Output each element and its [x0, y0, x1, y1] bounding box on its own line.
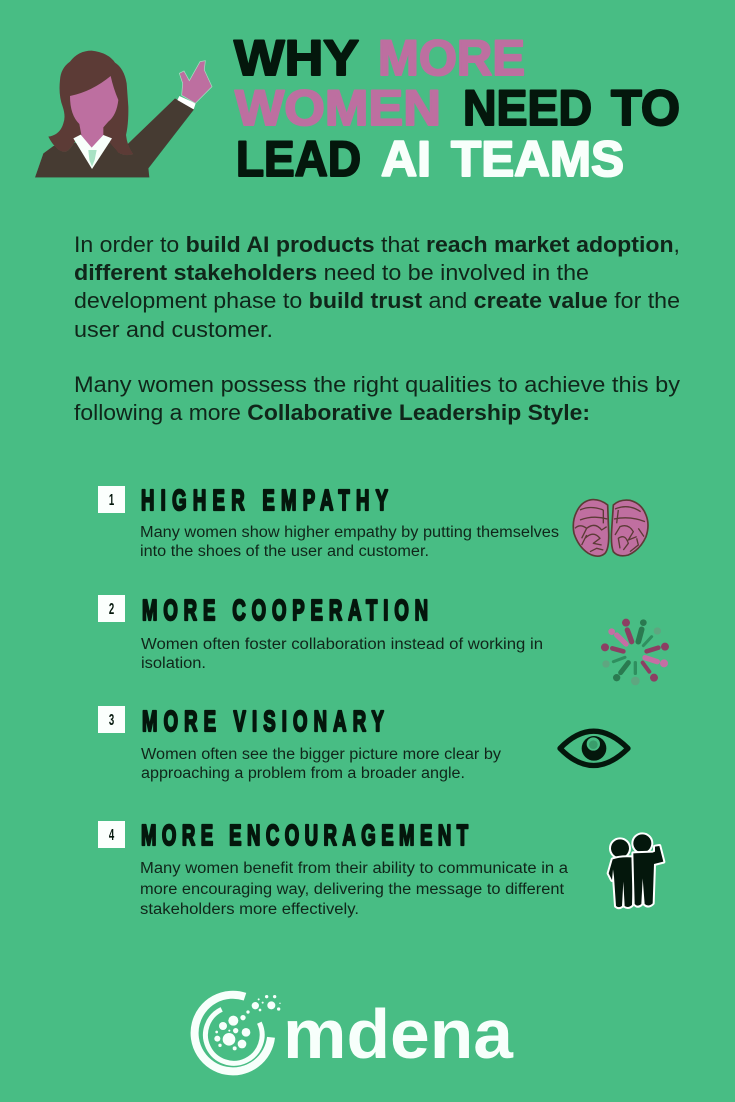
intro paragraph: different stakeholders need to be involved in the — [74, 260, 589, 285]
heading 2: MORE COOPERATION — [142, 595, 428, 627]
icon: brain — [573, 500, 648, 556]
illustration: woman pointing — [35, 51, 212, 177]
title: MORE — [378, 30, 525, 86]
title: TEAMS — [451, 131, 624, 187]
intro paragraph: In order to build AI products that reach market adoption , — [74, 232, 680, 257]
intro paragraph: user and customer. — [74, 317, 273, 342]
intro paragraph — [74, 232, 680, 342]
title: WHY — [234, 30, 359, 86]
text 2: Women often foster collaboration instead of working in — [141, 636, 543, 653]
title: LEAD — [236, 131, 361, 187]
collar — [73, 135, 112, 169]
title: TO — [611, 80, 680, 136]
title: WOMEN — [235, 80, 441, 136]
collaborative leadership paragraph: following a more Collaborative Leadership Style: — [74, 400, 590, 425]
number badge 4 — [98, 821, 125, 848]
text 3: approaching a problem from a broader angle. — [141, 765, 465, 782]
icon: ring of people — [601, 619, 669, 685]
number badge 1 — [98, 486, 125, 513]
text 2 — [141, 636, 543, 672]
number badge 3 — [98, 706, 125, 733]
item 4: more encouragement — [98, 820, 663, 918]
item 3: more visionary — [98, 706, 628, 782]
text 4 — [140, 860, 568, 918]
title — [234, 30, 680, 187]
logo: omdena — [195, 995, 514, 1073]
text 3: Women often see the bigger picture more clear by — [141, 746, 501, 763]
collaborative leadership paragraph: Many women possess the right qualities to achieve this by — [74, 372, 680, 397]
text 3 — [141, 746, 501, 782]
face — [70, 76, 118, 148]
heading 1: HIGHER EMPATHY — [141, 485, 388, 517]
number badge 2 — [98, 595, 125, 622]
icon: eye — [560, 731, 628, 765]
heading 3: MORE VISIONARY — [142, 706, 384, 738]
number badge 3: 3 — [109, 710, 114, 729]
logo wordmark: mdena — [283, 995, 514, 1073]
cuff — [177, 96, 196, 109]
icon: two friends — [609, 834, 663, 907]
item 1: higher empathy — [98, 485, 648, 560]
tie — [88, 150, 97, 167]
title: AI — [381, 131, 431, 187]
collaborative leadership paragraph — [74, 372, 680, 425]
hair — [48, 51, 133, 155]
hand — [179, 61, 212, 103]
number badge 1: 1 — [109, 490, 114, 509]
text 1 — [140, 524, 559, 560]
text 4: stakeholders more effectively. — [140, 901, 359, 918]
item 2: more cooperation — [98, 595, 669, 685]
logo mark — [195, 995, 281, 1071]
number badge 2: 2 — [109, 599, 114, 618]
title: NEED — [463, 80, 592, 136]
text 1: Many women show higher empathy by putting themselves — [140, 524, 559, 541]
number badge 4: 4 — [109, 825, 115, 844]
text 2: isolation. — [141, 655, 206, 672]
jacket — [35, 98, 194, 177]
text 4: Many women benefit from their ability to communicate in a — [140, 860, 568, 877]
text 4: more encouraging way, delivering the message to different — [140, 881, 565, 898]
intro paragraph: development phase to build trust and create value for the — [74, 288, 680, 313]
heading 4: MORE ENCOURAGEMENT — [141, 820, 468, 852]
text 1: into the shoes of the user and customer. — [140, 543, 429, 560]
